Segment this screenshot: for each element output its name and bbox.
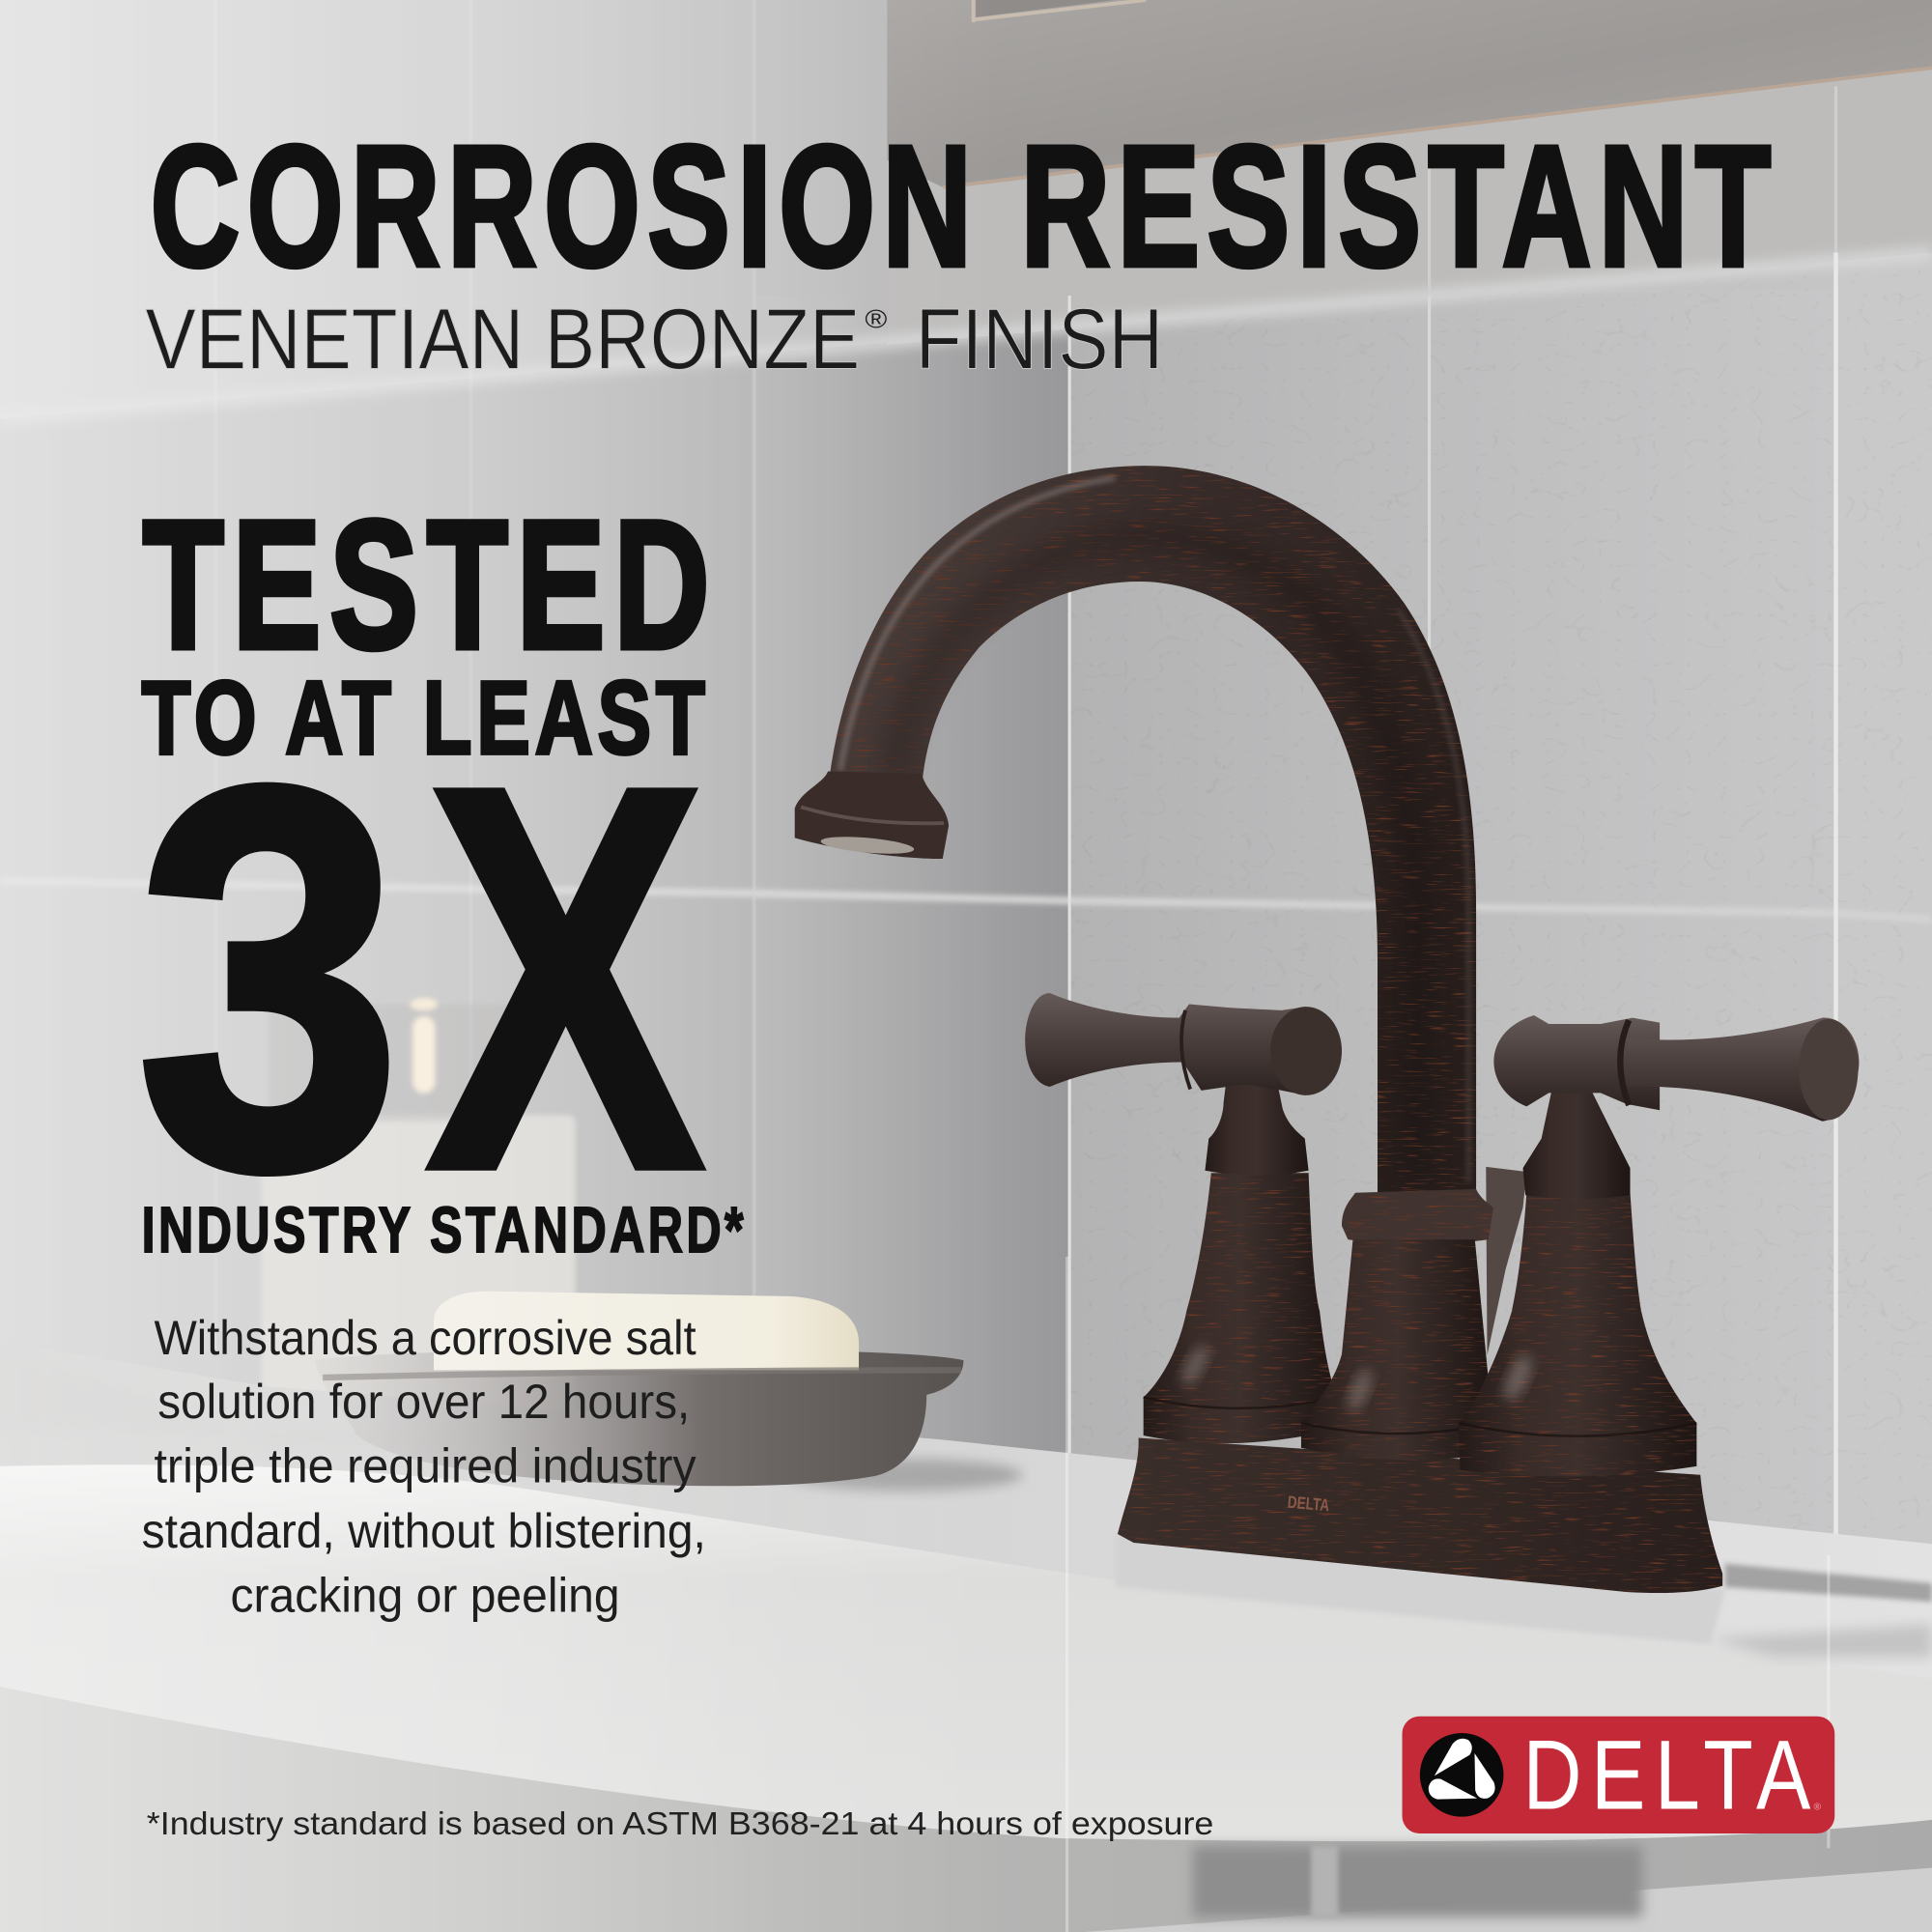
deck plate <box>1118 1438 1722 1593</box>
wordmark: DELTA <box>1523 1719 1820 1830</box>
body text <box>142 1311 706 1622</box>
body text: standard, without blistering, <box>142 1504 706 1558</box>
left lever <box>1025 993 1306 1095</box>
cabinet above the wall <box>887 0 1932 187</box>
tested: TESTED <box>143 483 719 687</box>
headline: tested to at least 3X industry standard <box>137 483 747 1281</box>
3X: X <box>428 675 705 1281</box>
spout <box>828 466 1476 1195</box>
industry standard: INDUSTRY STANDARD* <box>142 1194 747 1266</box>
body text: triple the required industry <box>154 1438 696 1492</box>
subtitle: FINISH <box>916 290 1163 386</box>
Delta logo <box>1403 1717 1834 1833</box>
candle jar <box>261 998 576 1435</box>
soap bar <box>434 1292 859 1370</box>
left pedestal <box>1144 1173 1337 1443</box>
right pedestal <box>1459 1193 1696 1476</box>
nozzle <box>795 771 949 859</box>
faucet <box>795 466 1859 1593</box>
Delta logo: ® <box>1814 1803 1822 1813</box>
footnote: *Industry standard is based on ASTM B368-21 at 4 hours of exposure <box>147 1806 1213 1842</box>
3X <box>137 675 705 1281</box>
soap dish <box>314 1350 963 1486</box>
right lever <box>1493 1015 1660 1110</box>
deck logo: DELTA <box>1287 1492 1330 1515</box>
subtitle: VENETIAN BRONZE <box>146 290 860 386</box>
left handle <box>1025 993 1342 1443</box>
3X: 3 <box>137 675 402 1281</box>
spout inner shading <box>894 536 1417 1182</box>
shadows <box>1725 1564 1932 1602</box>
spout highlight <box>840 478 1115 770</box>
body text: solution for over 12 hours, <box>157 1375 690 1429</box>
deck reflection <box>1115 1534 1725 1645</box>
dish front rim <box>323 1370 961 1378</box>
to at least: TO AT LEAST <box>142 659 710 776</box>
center pedestal <box>1301 1189 1493 1460</box>
basin <box>0 1464 1932 1841</box>
counter and sink <box>0 1257 1932 1932</box>
body text: Withstands a corrosive salt <box>154 1311 696 1365</box>
pop-up rod <box>1486 1167 1526 1355</box>
subtitle: ® <box>865 304 888 333</box>
under-rim lower counter <box>0 1687 1932 1932</box>
body text: cracking or peeling <box>231 1568 620 1622</box>
right handle <box>1459 1015 1859 1476</box>
icon: Delta triangle mark <box>1420 1733 1503 1817</box>
